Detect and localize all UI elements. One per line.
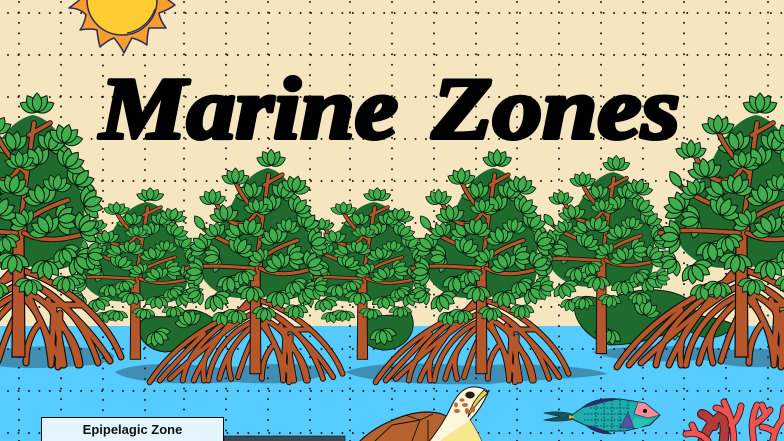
mangrove tree: far right (654, 93, 784, 357)
coral (686, 402, 784, 441)
turtle (358, 387, 488, 441)
parrotfish (544, 398, 660, 434)
title (98, 61, 680, 158)
sky background (0, 0, 784, 326)
mangrove roots: far right (617, 260, 784, 367)
dark panel bar (224, 436, 345, 441)
background bushes (139, 290, 735, 352)
mangrove roots: center left (150, 291, 343, 382)
mangrove tree: center left (181, 149, 332, 374)
zone label: Epipelagic Zone: Epipelagic Zone (83, 422, 182, 437)
title: Zones (431, 61, 680, 158)
mangrove roots: far left (0, 260, 121, 367)
zone label: Epipelagic Zone (42, 418, 224, 441)
mangrove tree: far left (0, 93, 108, 357)
water shadows under the mangroves (0, 346, 784, 384)
sun (69, 0, 175, 53)
water (0, 326, 784, 441)
mangrove tree: small right (531, 156, 673, 354)
mangrove tree: small center (292, 188, 434, 359)
mangrove tree: center right (407, 149, 558, 374)
mangrove tree: small left (65, 188, 207, 359)
title: Marine (98, 61, 398, 158)
leaf sprigs on the bushes (140, 296, 696, 353)
mangrove roots: center right (376, 291, 569, 382)
